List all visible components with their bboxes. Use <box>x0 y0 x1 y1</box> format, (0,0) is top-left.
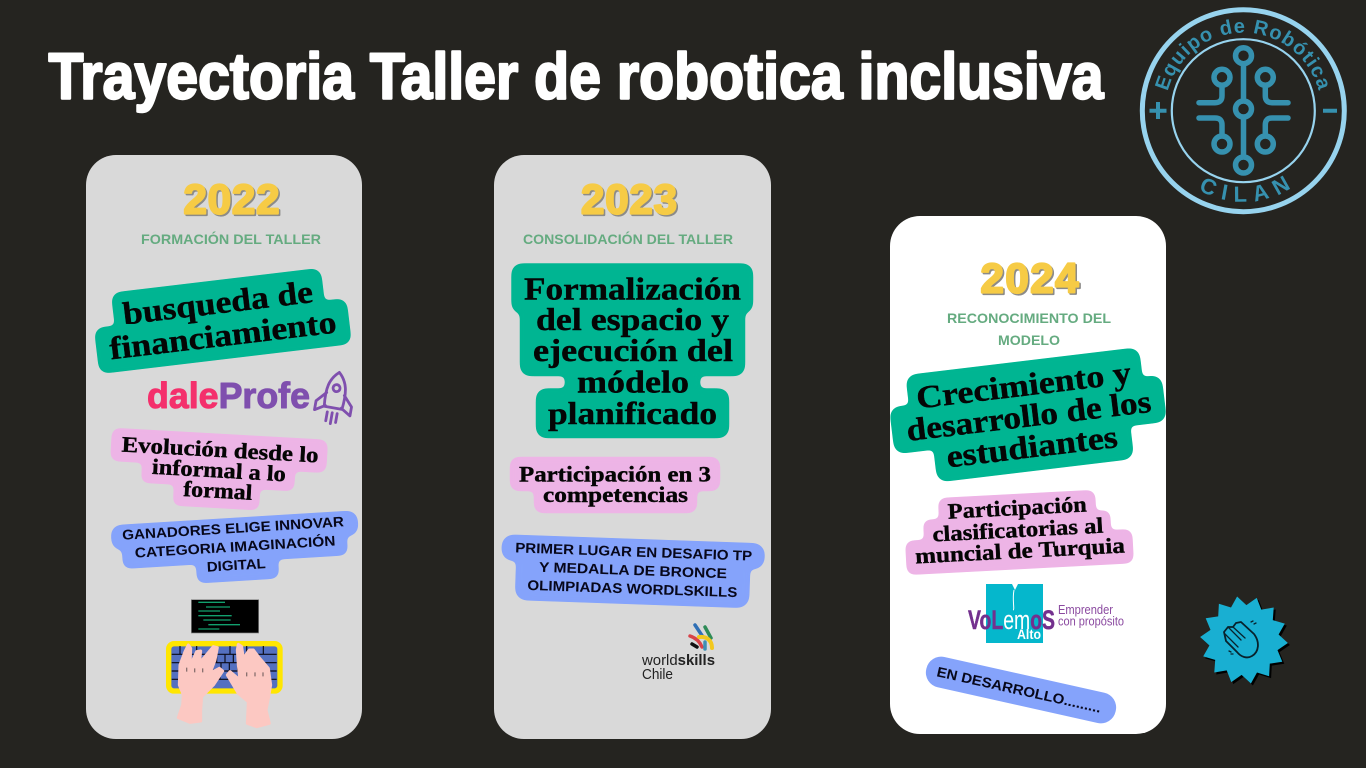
badge: clap icon <box>1200 596 1290 686</box>
pink pill: participación clasificatorias: clasificatorias al <box>932 513 1104 547</box>
blue pill: ganadores: CATEGORIA IMAGINACIÓN <box>134 531 336 561</box>
pink pill: participación clasificatorias: muncial de Turquia <box>914 532 1125 568</box>
logo: WorldSkills Chile <box>641 625 715 683</box>
blue pill: ganadores <box>111 510 361 588</box>
green pill: formalización <box>512 264 753 438</box>
green pill: formalización: ejecución del <box>533 332 733 368</box>
green pill: formalización: del espacio y <box>536 301 729 337</box>
blue pill: primer lugar: PRIMER LUGAR EN DESAFIO TP <box>515 539 752 564</box>
pink pill: participación en 3 competencias <box>510 457 720 513</box>
green pill: crecimiento: Crecimiento y <box>914 354 1133 416</box>
blue pill: ganadores: GANADORES ELIGE INNOVAR <box>122 513 344 543</box>
pink pill: Evolución desde lo informal a lo formal <box>108 428 328 514</box>
logo: daleProfe: daleProfe <box>147 375 310 416</box>
pink pill: Evolución desde lo informal a lo formal: informal a lo <box>151 454 287 486</box>
year 2024: 2024 <box>982 256 1081 303</box>
panel: 2022 <box>86 155 362 739</box>
logo: Volemos Alto: VoLemoS <box>968 605 1055 635</box>
pink pill: participación clasificatorias: Participación <box>947 491 1087 524</box>
logo: Volemos Alto: Alto <box>1017 626 1041 642</box>
pink pill: participación en 3 competencias: competencias <box>543 482 689 507</box>
blue pill: primer lugar <box>500 534 765 609</box>
logo: Volemos Alto: Emprender <box>1058 603 1113 617</box>
panel: 2024 <box>886 216 1171 734</box>
year 2023: 2023 <box>582 177 678 224</box>
illustration: hands on keyboard <box>169 644 280 727</box>
blue pill: en desarrollo: EN DESARROLLO......... <box>935 663 1103 716</box>
green pill: crecimiento: desarrollo de los <box>904 383 1153 448</box>
subtitle 2024: RECONOCIMIENTO DEL <box>947 310 1111 326</box>
subtitle 2024 <box>947 310 1111 348</box>
pink pill: Evolución desde lo informal a lo formal: formal <box>183 476 253 505</box>
subtitle 2024: MODELO <box>998 332 1060 348</box>
icon: clapping hands <box>1224 621 1258 657</box>
illustration: monitor with code <box>191 600 259 633</box>
blue pill: primer lugar: Y MEDALLA DE BRONCE <box>539 559 727 581</box>
green pill: crecimiento: estudiantes <box>944 418 1119 474</box>
green pill: formalización: Formalización <box>524 270 741 306</box>
pink pill: participación en 3 competencias: Participación en 3 <box>519 462 711 486</box>
pink pill: participación clasificatorias <box>903 488 1134 575</box>
logo: Equipo de Robótica CILAN: CILAN <box>1201 176 1290 202</box>
title: Trayectoria Taller de robotica inclusiva <box>48 40 1104 112</box>
logo: WorldSkills Chile: worldskills <box>641 652 715 669</box>
year 2022: 2022 <box>184 176 280 222</box>
green pill: busqueda de financiamiento: financiamiento <box>107 304 338 366</box>
green pill: busqueda de financiamiento: busqueda de <box>121 273 315 332</box>
year 2022: 2022 <box>185 177 281 224</box>
green pill: formalización: planificado <box>548 395 717 431</box>
subtitle 2023: CONSOLIDACIÓN DEL TALLER <box>523 230 733 247</box>
icon: rocket <box>313 369 357 427</box>
green pill: busqueda de financiamiento <box>90 265 352 374</box>
pink pill: Evolución desde lo informal a lo formal: Evolución desde lo <box>121 431 319 467</box>
blue pill: primer lugar: OLIMPIADAS WORDLSKILLS <box>527 577 738 600</box>
logo: Volemos Alto <box>968 584 1124 643</box>
blue pill: ganadores: DIGITAL <box>206 555 267 575</box>
subtitle 2022: FORMACIÓN DEL TALLER <box>141 230 321 247</box>
green pill: formalización: módelo <box>577 364 689 400</box>
logo: Volemos Alto: con propósito <box>1058 614 1124 628</box>
logo: Equipo de Robótica CILAN <box>1140 7 1347 214</box>
panel: 2023 <box>494 155 771 739</box>
blue pill: en desarrollo <box>923 654 1119 726</box>
year 2024: 2024 <box>980 254 1079 302</box>
logo: daleProfe <box>147 369 357 427</box>
year 2023: 2023 <box>581 176 677 222</box>
green pill: crecimiento <box>886 345 1171 487</box>
logo: WorldSkills Chile: Chile <box>642 666 673 683</box>
logo: Equipo de Robótica CILAN: Equipo de Robótica <box>1154 19 1328 91</box>
